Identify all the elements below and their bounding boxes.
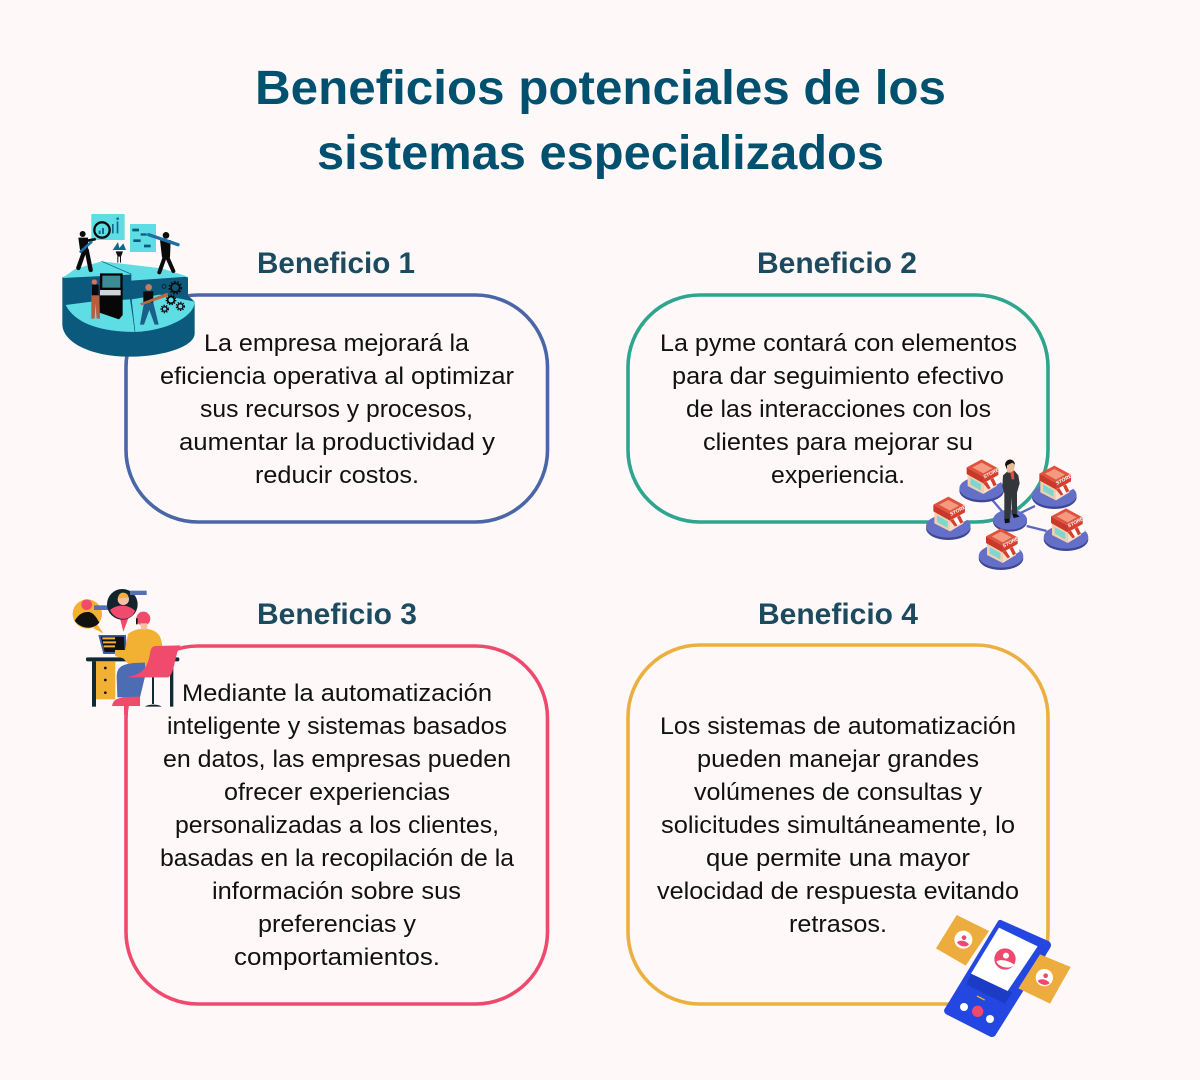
gears bbox=[161, 282, 184, 313]
text: beneficio 3: personalizadas a los clientes, bbox=[175, 812, 499, 839]
store 2 bbox=[1039, 466, 1074, 500]
panel: beneficio 1 bbox=[126, 247, 548, 522]
text: beneficio 1: sus recursos y procesos, bbox=[200, 396, 473, 423]
heading: beneficio 2: Beneficio 2 bbox=[757, 247, 917, 280]
icon: phone with profile cards bbox=[936, 915, 1071, 1037]
store 1: STORE bbox=[982, 467, 1001, 480]
card outline: beneficio 2 bbox=[628, 295, 1048, 522]
text: beneficio 1: aumentar la productividad y bbox=[179, 429, 496, 456]
store 4 bbox=[1051, 508, 1085, 543]
chart board bbox=[91, 214, 125, 240]
icon: team on pie chart bbox=[62, 214, 195, 357]
right card bbox=[1018, 954, 1071, 1004]
store 2: STORE bbox=[1055, 473, 1074, 487]
text: beneficio 3: Mediante la automatización bbox=[182, 680, 492, 707]
text: beneficio 1: reducir costos. bbox=[255, 462, 419, 489]
text: beneficio 2 bbox=[660, 330, 1017, 489]
desk bbox=[86, 657, 179, 661]
text: beneficio 4: retrasos. bbox=[789, 911, 887, 938]
text: beneficio 2: clientes para mejorar su bbox=[703, 429, 973, 456]
text: beneficio 2: para dar seguimiento efectivo bbox=[672, 363, 1004, 390]
phone bbox=[944, 920, 1051, 1037]
text: beneficio 3: en datos, las empresas pueden bbox=[163, 746, 511, 773]
heading: beneficio 3: Beneficio 3 bbox=[257, 598, 417, 631]
person with pencil bbox=[149, 232, 178, 272]
text: beneficio 3 bbox=[160, 680, 514, 971]
store 3 bbox=[933, 497, 968, 531]
card outline: beneficio 1 bbox=[126, 295, 548, 522]
icon: manager with connected stores bbox=[926, 459, 1088, 570]
text: beneficio 4 bbox=[657, 713, 1019, 938]
text: beneficio 1 bbox=[160, 330, 514, 489]
text: beneficio 3: ofrecer experiencias bbox=[224, 779, 450, 806]
text: beneficio 1: eficiencia operativa al optimizar bbox=[160, 363, 514, 390]
store 4: STORE bbox=[1067, 516, 1085, 529]
title bbox=[255, 62, 946, 180]
text: beneficio 1: La empresa mejorará la bbox=[204, 330, 469, 357]
text: beneficio 4: Los sistemas de automatización bbox=[660, 713, 1016, 740]
left bubble bbox=[93, 623, 103, 633]
agent bbox=[115, 629, 162, 670]
text: beneficio 2: experiencia. bbox=[771, 462, 905, 489]
panel: beneficio 3 bbox=[126, 598, 548, 1004]
card outline: beneficio 3 bbox=[126, 646, 548, 1004]
text: beneficio 2: de las interacciones con los bbox=[686, 396, 991, 423]
store 5 bbox=[986, 528, 1020, 563]
text: beneficio 4: velocidad de respuesta evitando bbox=[657, 878, 1019, 905]
text: beneficio 4: pueden manejar grandes bbox=[697, 746, 979, 773]
icon: customer service agent at desk bbox=[73, 589, 181, 715]
text: beneficio 3: comportamientos. bbox=[234, 944, 440, 971]
store 5: STORE bbox=[1002, 536, 1020, 549]
laptop bbox=[98, 635, 127, 654]
panel: beneficio 2 bbox=[628, 247, 1048, 522]
right bubble bbox=[120, 618, 128, 632]
operator bbox=[92, 279, 97, 285]
text: beneficio 3: información sobre sus bbox=[212, 878, 461, 905]
text: beneficio 4: volúmenes de consultas y bbox=[694, 779, 983, 806]
flow board bbox=[130, 224, 156, 252]
heading: beneficio 1: Beneficio 1 bbox=[257, 247, 415, 280]
text: beneficio 4: que permite una mayor bbox=[706, 845, 970, 872]
machine bbox=[99, 273, 123, 319]
heading: beneficio 4: Beneficio 4 bbox=[758, 598, 918, 631]
panel: beneficio 4 bbox=[628, 598, 1048, 1004]
person with magnifier bbox=[78, 231, 95, 270]
text: beneficio 2: La pyme contará con elementos bbox=[660, 330, 1017, 357]
text: beneficio 3: basadas en la recopilación de la bbox=[160, 845, 514, 872]
worker with wrench bbox=[145, 284, 152, 291]
chair bbox=[125, 645, 181, 677]
card outline: beneficio 4 bbox=[628, 645, 1048, 1004]
text: beneficio 3: preferencias y bbox=[258, 911, 417, 938]
title: sistemas especializados bbox=[317, 127, 884, 180]
title: Beneficios potenciales de los bbox=[255, 62, 946, 115]
text: beneficio 4: solicitudes simultáneamente, lo bbox=[661, 812, 1015, 839]
store 3: STORE bbox=[949, 504, 968, 518]
text: beneficio 3: inteligente y sistemas basados bbox=[167, 713, 507, 740]
store 1 bbox=[967, 459, 1001, 494]
manager bbox=[1002, 459, 1020, 523]
left card bbox=[936, 915, 989, 966]
plant bbox=[113, 242, 126, 250]
